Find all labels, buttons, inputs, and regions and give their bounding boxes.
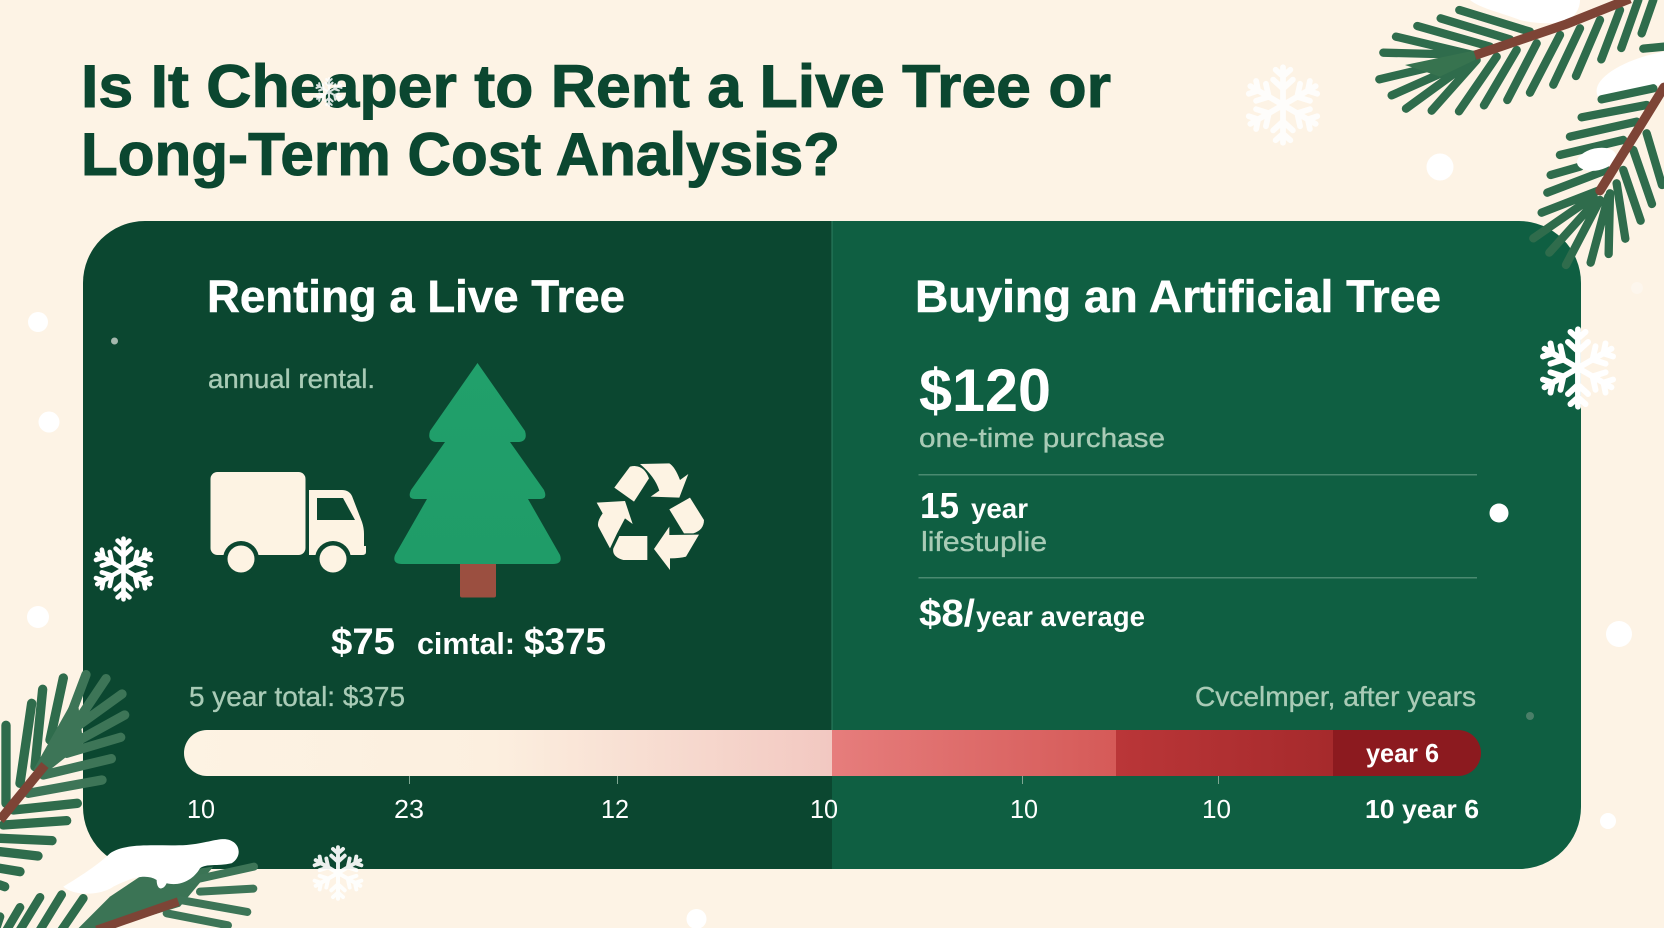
chart: cost timeline bar <box>184 730 1481 824</box>
axis labels <box>187 794 1479 824</box>
axis labels: 10 <box>1202 794 1231 824</box>
stat: $375: $375 <box>524 621 606 662</box>
panel: renting a live tree <box>189 271 704 712</box>
axis labels: 10 <box>1010 794 1038 824</box>
pine branch: bottom left <box>0 675 254 928</box>
heading: renting: Renting a Live Tree <box>207 271 625 322</box>
icon: green tree <box>394 363 561 598</box>
text: 5 year total: 5 year total: $375 <box>189 681 405 712</box>
icon: snowflake right <box>1539 329 1617 407</box>
stat: $75: $75 <box>331 621 395 662</box>
icon: snowflake bottom <box>312 847 364 899</box>
bar label: year 6: year 6 <box>1366 738 1439 768</box>
icon: snowflake top <box>1245 67 1321 143</box>
title <box>81 53 1111 188</box>
stat: year: year <box>971 493 1028 524</box>
title: Is It Cheaper to Rent a Live Tree or <box>81 53 1111 120</box>
stat: $8/: $8/ <box>919 593 975 635</box>
axis labels: 10 <box>810 794 838 824</box>
title: Long-Term Cost Analysis? <box>81 121 840 188</box>
text: annual rental: annual rental. <box>208 364 375 394</box>
axis labels: 23 <box>394 794 424 824</box>
text: one-time purchase: one-time purchase <box>919 423 1165 453</box>
icon: recycle <box>597 463 704 570</box>
text: lifestuplie: lifestuplie <box>921 526 1047 557</box>
axis labels: 12 <box>601 794 629 824</box>
stat: cimtal: cimtal: <box>417 626 515 661</box>
icon: delivery truck <box>210 472 366 577</box>
pine branch: top right <box>1379 0 1664 265</box>
axis labels: 10 year 6 <box>1365 794 1479 824</box>
icon: small snowflake over title <box>315 78 343 106</box>
panel: buying an artificial tree <box>915 271 1477 712</box>
text: cheaper after years: Cvcelmper, after years <box>1195 681 1476 712</box>
panel: comparison card <box>83 221 1581 869</box>
heading: buying: Buying an Artificial Tree <box>915 271 1441 322</box>
bar segments <box>184 730 1481 776</box>
stat: $120: $120 <box>919 357 1051 424</box>
stat: year average: year average <box>976 601 1145 632</box>
icon: snowflake left <box>93 539 154 599</box>
stat: 15: 15 <box>920 485 959 526</box>
axis labels: 10 <box>187 794 215 824</box>
